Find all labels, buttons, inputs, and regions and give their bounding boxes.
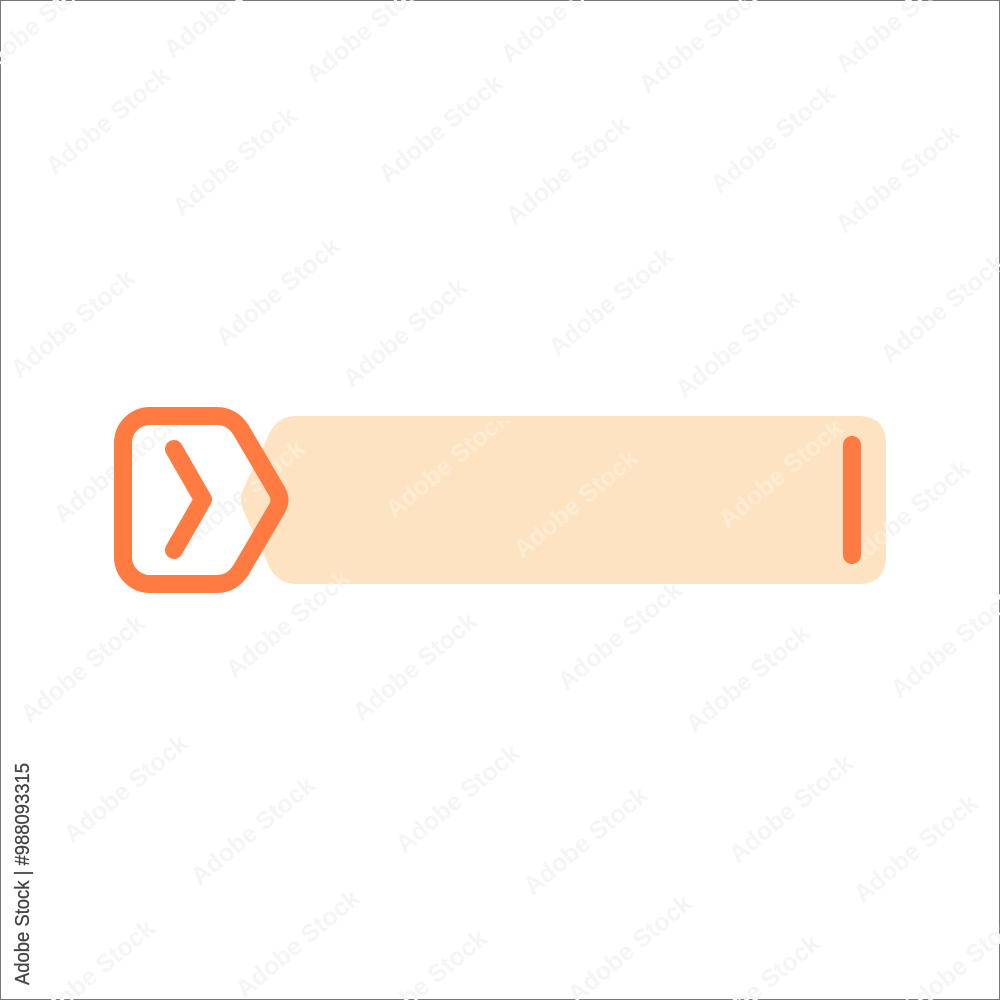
watermark pattern: Adobe Stock — [347, 607, 482, 727]
icon: chevron arrow — [174, 449, 203, 550]
faint watermark over bar: Adobe Stock — [713, 414, 848, 534]
beige label bar — [241, 416, 886, 584]
watermark pattern: Adobe Stock — [543, 242, 678, 362]
watermark pattern: Adobe Stock — [840, 454, 975, 574]
watermark pattern: Adobe Stock — [373, 69, 508, 189]
watermark pattern: Adobe Stock — [830, 119, 965, 239]
faint watermark over bar — [244, 421, 886, 584]
watermark pattern: Adobe Stock — [500, 111, 635, 231]
vertical accent bar — [843, 436, 861, 564]
watermark pattern: Adobe Stock — [680, 619, 815, 739]
watermark pattern: Adobe Stock — [167, 102, 302, 222]
watermark pattern: Adobe Stock — [15, 609, 150, 729]
watermark pattern: Adobe Stock — [518, 781, 653, 901]
watermark pattern: Adobe Stock — [220, 564, 355, 684]
watermark pattern: Adobe Stock — [670, 284, 805, 404]
watermark pattern: Adobe Stock — [58, 729, 193, 849]
faint watermark over bar: Adobe Stock — [840, 454, 975, 574]
watermark pattern: Adobe Stock — [552, 576, 687, 696]
watermark pattern: Adobe Stock — [5, 264, 140, 384]
watermark pattern: Adobe Stock — [185, 771, 320, 891]
faint watermark over bar: Adobe Stock — [380, 404, 515, 524]
faint watermark over bar: Adobe Stock — [508, 444, 643, 564]
watermark pattern: Adobe Stock — [723, 749, 858, 869]
faint watermark over bar: Adobe Stock — [175, 434, 310, 554]
watermark pattern: Adobe Stock — [40, 61, 175, 181]
watermark pattern: Adobe Stock — [48, 409, 183, 529]
watermark pattern: Adobe Stock — [337, 273, 472, 393]
watermark pattern: Adobe Stock — [390, 739, 525, 859]
watermark pattern: Adobe Stock — [848, 789, 983, 909]
watermark pattern: Adobe Stock — [175, 434, 310, 554]
faint watermark over bar: Adobe Stock — [220, 564, 355, 684]
watermark pattern: Adobe Stock — [210, 232, 345, 352]
stock credit text: Adobe Stock | #988093315 — [11, 763, 34, 985]
icon: orange hexagon badge outline — [123, 416, 280, 584]
watermark pattern: Adobe Stock — [705, 79, 840, 199]
